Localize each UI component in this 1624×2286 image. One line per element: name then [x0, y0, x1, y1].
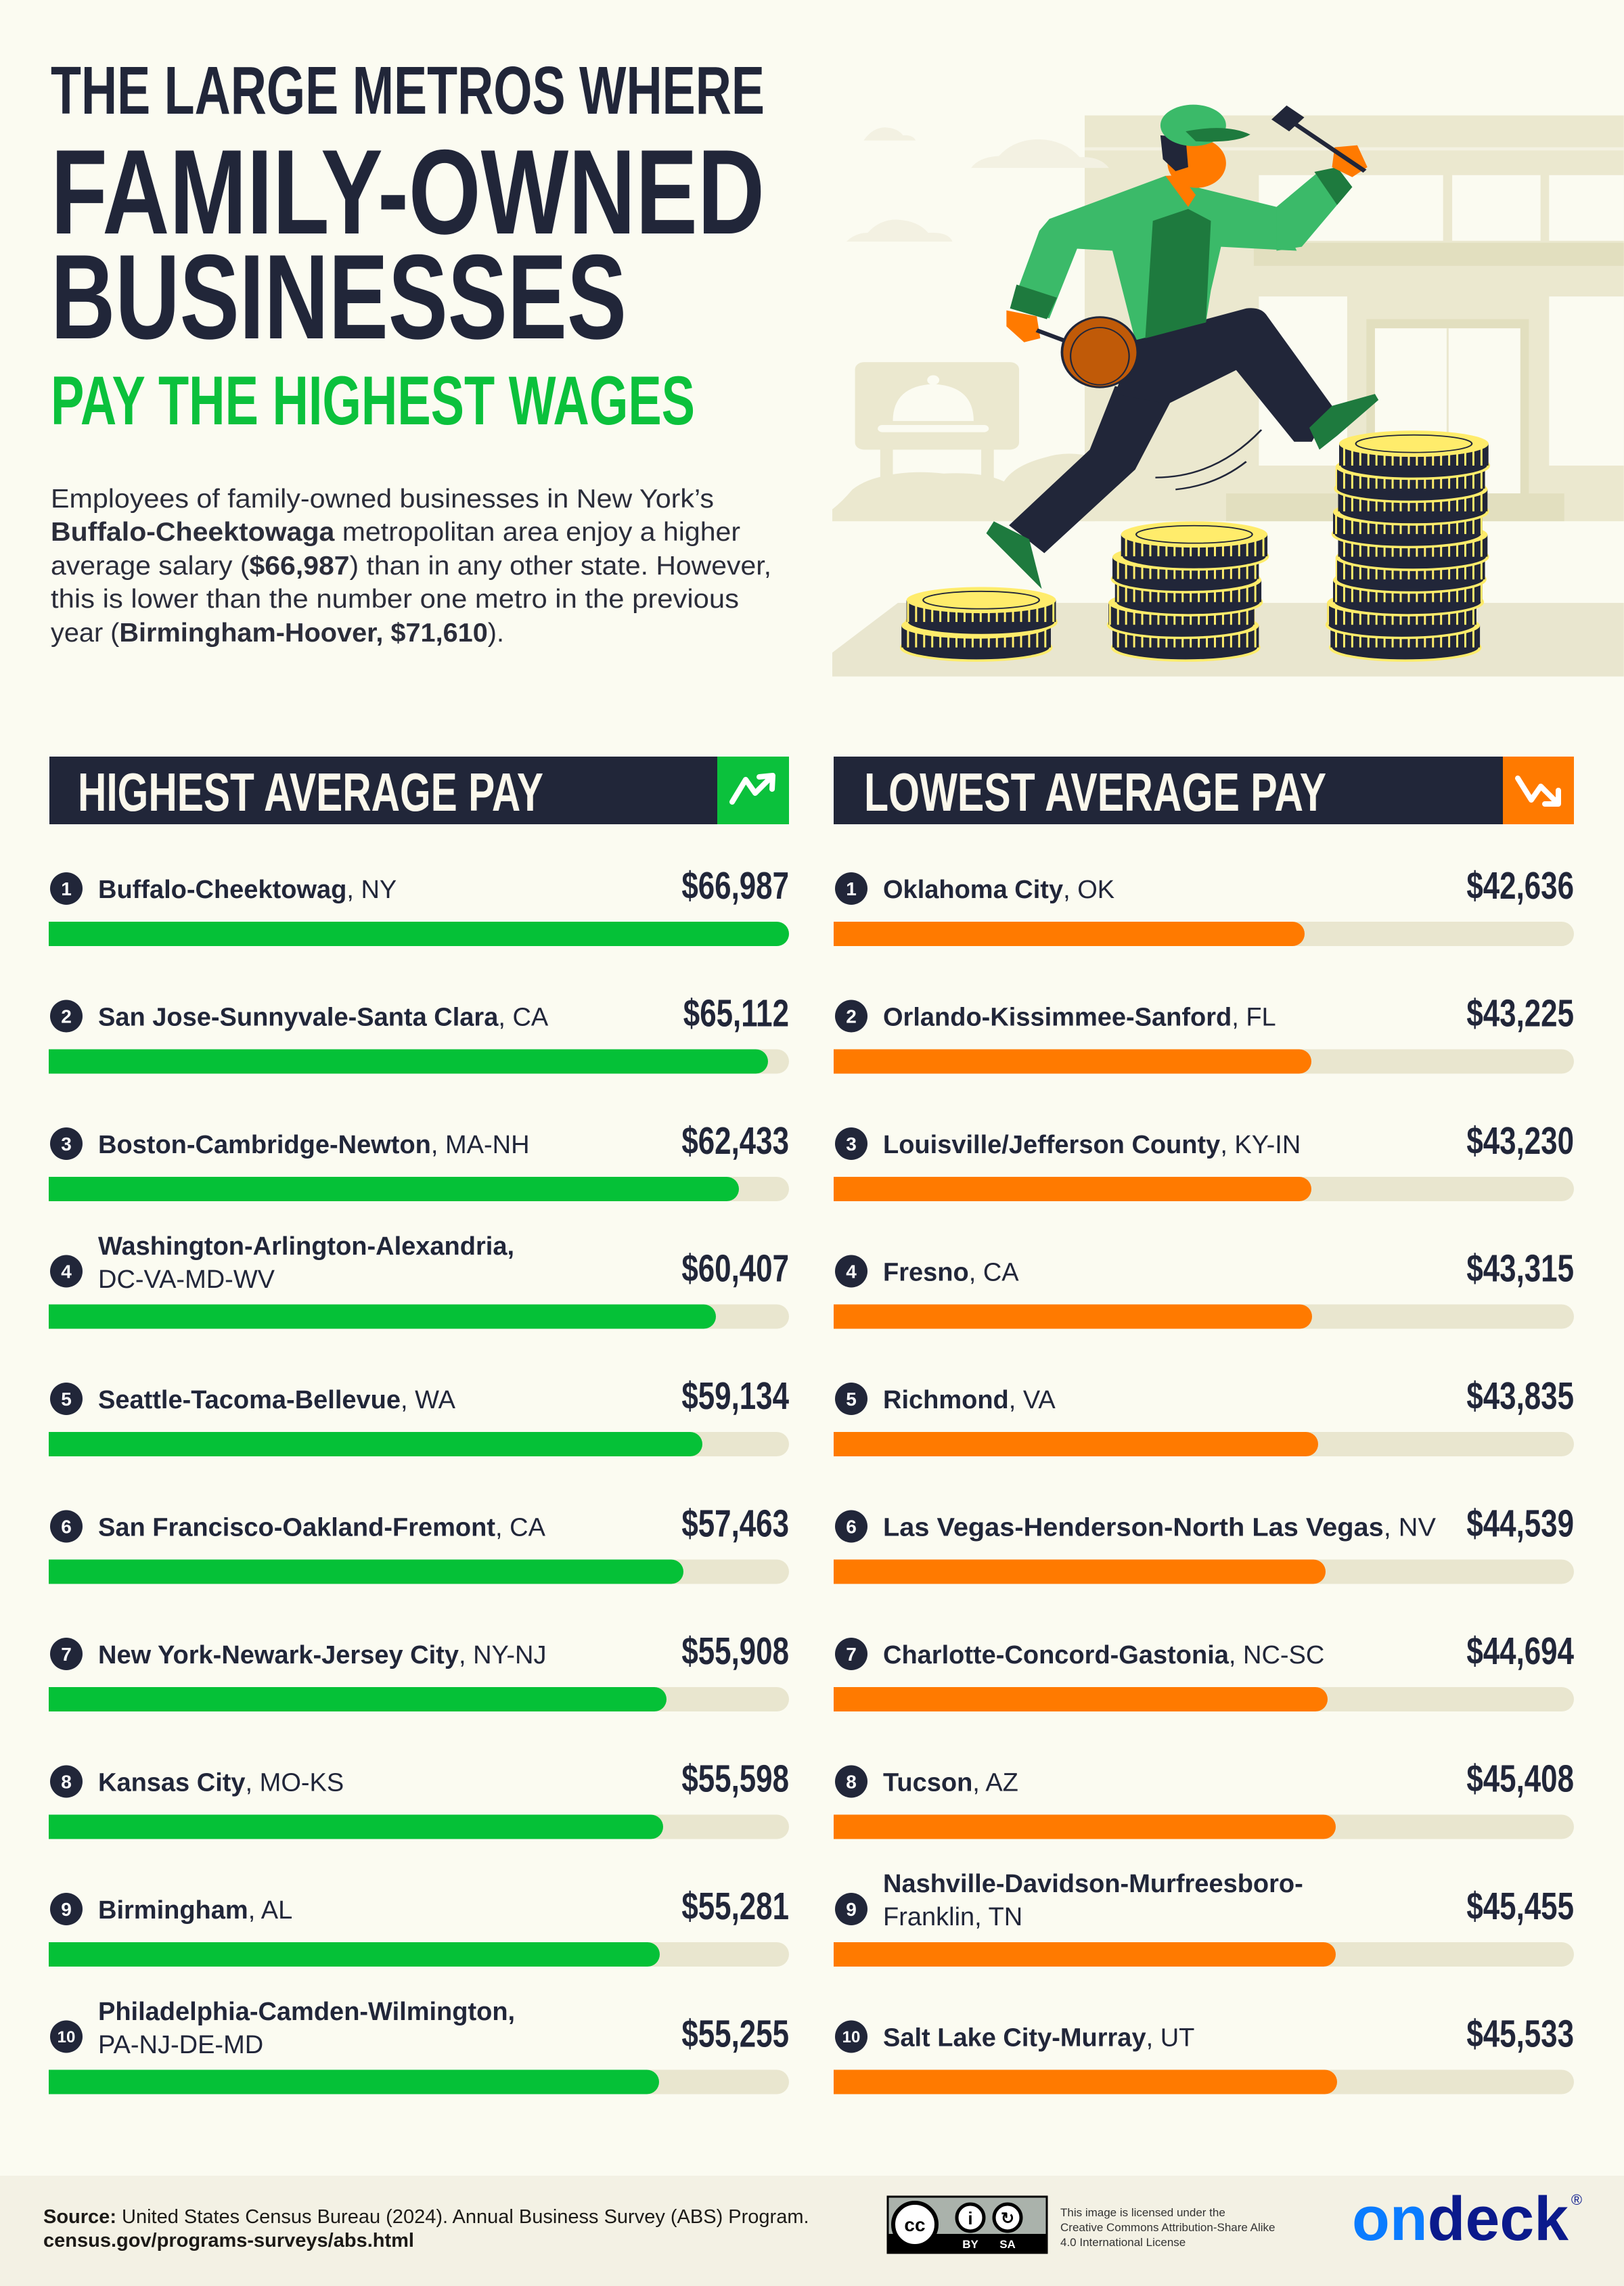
icon: creative commons badge: BY [962, 2238, 978, 2251]
row 10 [834, 2012, 1574, 2094]
row 1: Oklahoma City, OK [883, 876, 1114, 904]
intro paragraph: average salary ( $66,987) than in any other state. However, [51, 552, 771, 581]
row 7: 7 [61, 1644, 72, 1665]
row 6: Las Vegas-Henderson-North Las Vegas , NV [883, 1513, 1437, 1542]
row 4: Fresno, CA [883, 1259, 1019, 1287]
clouds [847, 127, 1109, 242]
row 9: 9 [61, 1899, 72, 1920]
row 7 [49, 1629, 789, 1711]
license text: Creative Commons Attribution-Share Alike [1060, 2221, 1275, 2234]
row 10: 10 [58, 2028, 75, 2046]
footer [0, 2176, 1624, 2286]
row 4 [49, 1232, 789, 1329]
row 2: 2 [846, 1006, 857, 1027]
row 7: Charlotte-Concord-Gastonia, NC-SC [883, 1641, 1324, 1669]
row 9: 9 [846, 1899, 857, 1920]
row 9: Birmingham, AL [98, 1896, 292, 1925]
row 10: PA-NJ-DE-MD [98, 2031, 263, 2059]
row 2: Orlando-Kissimmee-Sanford, FL [883, 1003, 1276, 1031]
sign with cloche [855, 362, 1019, 482]
row 6: $57,463 [681, 1502, 789, 1545]
row 2: $43,225 [1466, 991, 1574, 1035]
row 10: Salt Lake City-Murray, UT [883, 2023, 1194, 2052]
row 2 [834, 991, 1574, 1073]
row 3: 3 [846, 1134, 857, 1155]
row 3: $62,433 [681, 1119, 789, 1162]
header: highest average pay: HIGHEST AVERAGE PAY [78, 762, 543, 822]
intro paragraph: year (Birmingham-Hoover, $71,610). [51, 619, 504, 648]
coin stacks [901, 430, 1489, 660]
row 4: Washington-Arlington-Alexandria, [98, 1232, 514, 1261]
title: THE LARGE METROS WHERE [51, 53, 765, 129]
row 8: $55,598 [681, 1757, 789, 1800]
row 5 [834, 1374, 1574, 1456]
icon: creative commons badge: cc [904, 2214, 926, 2235]
row 7: $44,694 [1466, 1629, 1575, 1672]
source text [43, 2206, 809, 2251]
row 4: 4 [61, 1261, 72, 1282]
row 6: San Francisco-Oakland-Fremont, CA [98, 1513, 546, 1542]
license text [1060, 2206, 1275, 2249]
row 3: $43,230 [1466, 1119, 1574, 1162]
intro paragraph: Buffalo-Cheektowaga metropolitan area enjoy a higher [51, 518, 740, 547]
row 8: Kansas City, MO-KS [98, 1769, 344, 1797]
row 4 [834, 1247, 1574, 1329]
row 3: Boston-Cambridge-Newton, MA-NH [98, 1131, 530, 1159]
row 1 [834, 864, 1574, 946]
intro paragraph [51, 485, 771, 648]
row 9 [834, 1870, 1574, 1967]
subtitle: PAY THE HIGHEST WAGES [51, 362, 695, 439]
row 1: $66,987 [681, 864, 789, 907]
logo: ondeck: ondeck [1352, 2184, 1569, 2254]
row 1 [49, 864, 789, 946]
row 7: New York-Newark-Jersey City, NY-NJ [98, 1641, 546, 1669]
bushes and ground [832, 453, 1095, 521]
row 5: 5 [846, 1389, 857, 1410]
row 9: $45,455 [1466, 1884, 1574, 1927]
license text: 4.0 International License [1060, 2236, 1186, 2249]
row 8 [49, 1757, 789, 1839]
row 1: 1 [61, 878, 72, 899]
icon: creative commons badge: SA [999, 2238, 1016, 2251]
row 3 [834, 1119, 1574, 1201]
row 9: Franklin, TN [883, 1903, 1022, 1931]
row 5: Richmond, VA [883, 1386, 1056, 1414]
row 4: DC-VA-MD-WV [98, 1265, 275, 1294]
row 9 [49, 1884, 789, 1967]
row 6: $44,539 [1466, 1502, 1574, 1545]
motion lines [1155, 430, 1261, 489]
row 1: $42,636 [1466, 864, 1574, 907]
header: lowest average pay: LOWEST AVERAGE PAY [864, 762, 1326, 822]
row 5 [49, 1374, 790, 1456]
source text: Source: United States Census Bureau (2024). Annual Business Survey (ABS) Program. [43, 2206, 809, 2228]
title [51, 53, 765, 364]
row 7: $55,908 [681, 1629, 789, 1672]
icon: creative commons badge: i [968, 2208, 973, 2228]
row 7 [834, 1629, 1575, 1711]
row 3 [49, 1119, 789, 1201]
panel: highest average pay list [49, 864, 790, 2094]
row 6: 6 [846, 1516, 857, 1538]
row 10 [49, 1998, 789, 2094]
row 9: Nashville-Davidson-Murfreesboro- [883, 1870, 1303, 1898]
row 5: $59,134 [681, 1374, 790, 1417]
intro paragraph: Employees of family-owned businesses in New York’s [51, 485, 714, 514]
row 8: 8 [61, 1772, 72, 1792]
row 5: 5 [61, 1389, 72, 1410]
row 1: Buffalo-Cheektowag, NY [98, 876, 397, 904]
row 2: $65,112 [683, 991, 789, 1035]
row 8: $45,408 [1466, 1757, 1574, 1800]
icon: creative commons badge [888, 2197, 1047, 2253]
row 8: Tucson, AZ [883, 1769, 1018, 1797]
row 4: 4 [846, 1261, 857, 1282]
row 6: 6 [61, 1516, 72, 1538]
row 3: 3 [61, 1134, 72, 1155]
building background [1085, 116, 1624, 521]
title: FAMILY-OWNED [51, 125, 765, 259]
row 8 [834, 1757, 1574, 1839]
row 4: $43,315 [1466, 1247, 1574, 1290]
logo: ondeck: ® [1571, 2191, 1582, 2208]
row 2: San Jose-Sunnyvale-Santa Clara, CA [98, 1003, 549, 1031]
row 10: $55,255 [681, 2012, 789, 2055]
row 2: 2 [61, 1006, 72, 1027]
row 5: Seattle-Tacoma-Bellevue, WA [98, 1386, 456, 1414]
icon: trend down [1503, 757, 1574, 824]
row 10: $45,533 [1466, 2012, 1574, 2055]
icon: creative commons badge: ↻ [1001, 2210, 1014, 2228]
row 10: Philadelphia-Camden-Wilmington, [98, 1998, 515, 2026]
intro paragraph: this is lower than the number one metro in the previous [51, 585, 739, 614]
source text: census.gov/programs-surveys/abs.html [43, 2230, 414, 2251]
row 1: 1 [846, 878, 857, 899]
row 8: 8 [846, 1772, 857, 1792]
row 6 [49, 1502, 789, 1584]
panel: lowest average pay list [834, 864, 1575, 2094]
license text: This image is licensed under the [1060, 2206, 1225, 2219]
row 4: $60,407 [681, 1247, 789, 1290]
row 7: 7 [846, 1644, 857, 1665]
chef body [1006, 105, 1368, 387]
chef legs [1009, 308, 1332, 553]
row 10: 10 [842, 2028, 860, 2046]
row 5: $43,835 [1466, 1374, 1574, 1417]
shoes [987, 394, 1378, 589]
icon: trend up [717, 757, 789, 824]
row 2 [49, 991, 789, 1073]
title: BUSINESSES [51, 229, 627, 364]
row 6 [834, 1502, 1574, 1584]
illustration: chef running up coin stacks [832, 105, 1624, 677]
row 3: Louisville/Jefferson County, KY-IN [883, 1131, 1301, 1159]
row 9: $55,281 [681, 1884, 789, 1927]
